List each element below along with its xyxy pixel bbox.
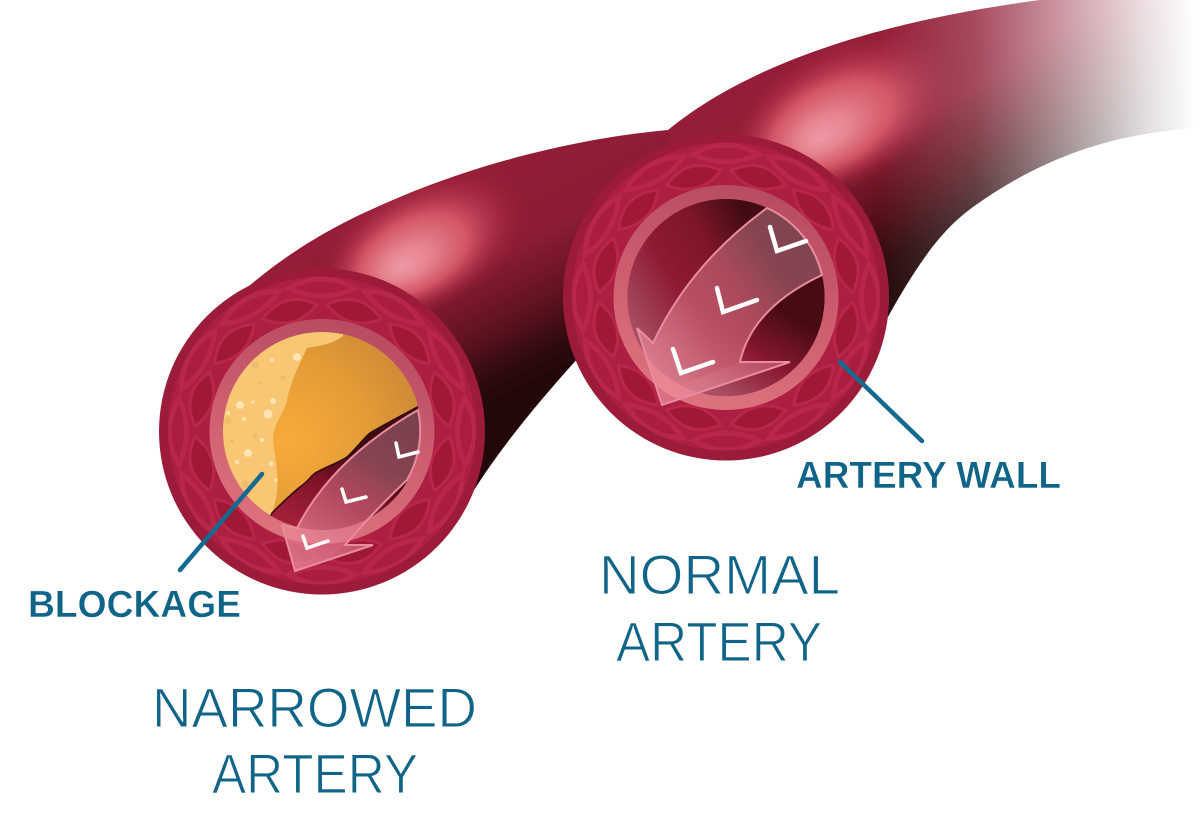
narrowed artery tube	[249, 130, 671, 491]
label: artery wall: ARTERY WALL	[796, 455, 1061, 497]
heading: normal artery	[599, 543, 840, 673]
plaque core	[272, 334, 418, 512]
channel below plaque	[270, 406, 421, 530]
open lumen	[628, 199, 824, 396]
artery wall lattice	[563, 134, 889, 460]
heading: narrowed artery: NARROWED	[152, 676, 477, 739]
heading: normal artery: NORMAL	[599, 543, 840, 606]
leader line: blockage	[180, 474, 262, 570]
flow chevrons	[303, 443, 418, 548]
normal artery tube fading out	[668, 0, 1184, 318]
narrowed artery cross-section	[159, 268, 485, 594]
leader line: artery wall	[840, 362, 922, 441]
heading: narrowed artery	[152, 676, 477, 805]
heading: narrowed artery: ARTERY	[212, 742, 418, 805]
artery wall lattice	[159, 268, 485, 594]
blocked lumen	[223, 332, 420, 530]
blood flow arrow	[637, 208, 822, 405]
heading: normal artery: ARTERY	[616, 610, 822, 673]
blood flow arrow	[282, 410, 420, 571]
normal artery cross-section	[563, 134, 889, 460]
plaque speckles	[226, 353, 301, 482]
label: blockage: BLOCKAGE	[28, 584, 241, 626]
flow chevrons	[673, 227, 806, 373]
